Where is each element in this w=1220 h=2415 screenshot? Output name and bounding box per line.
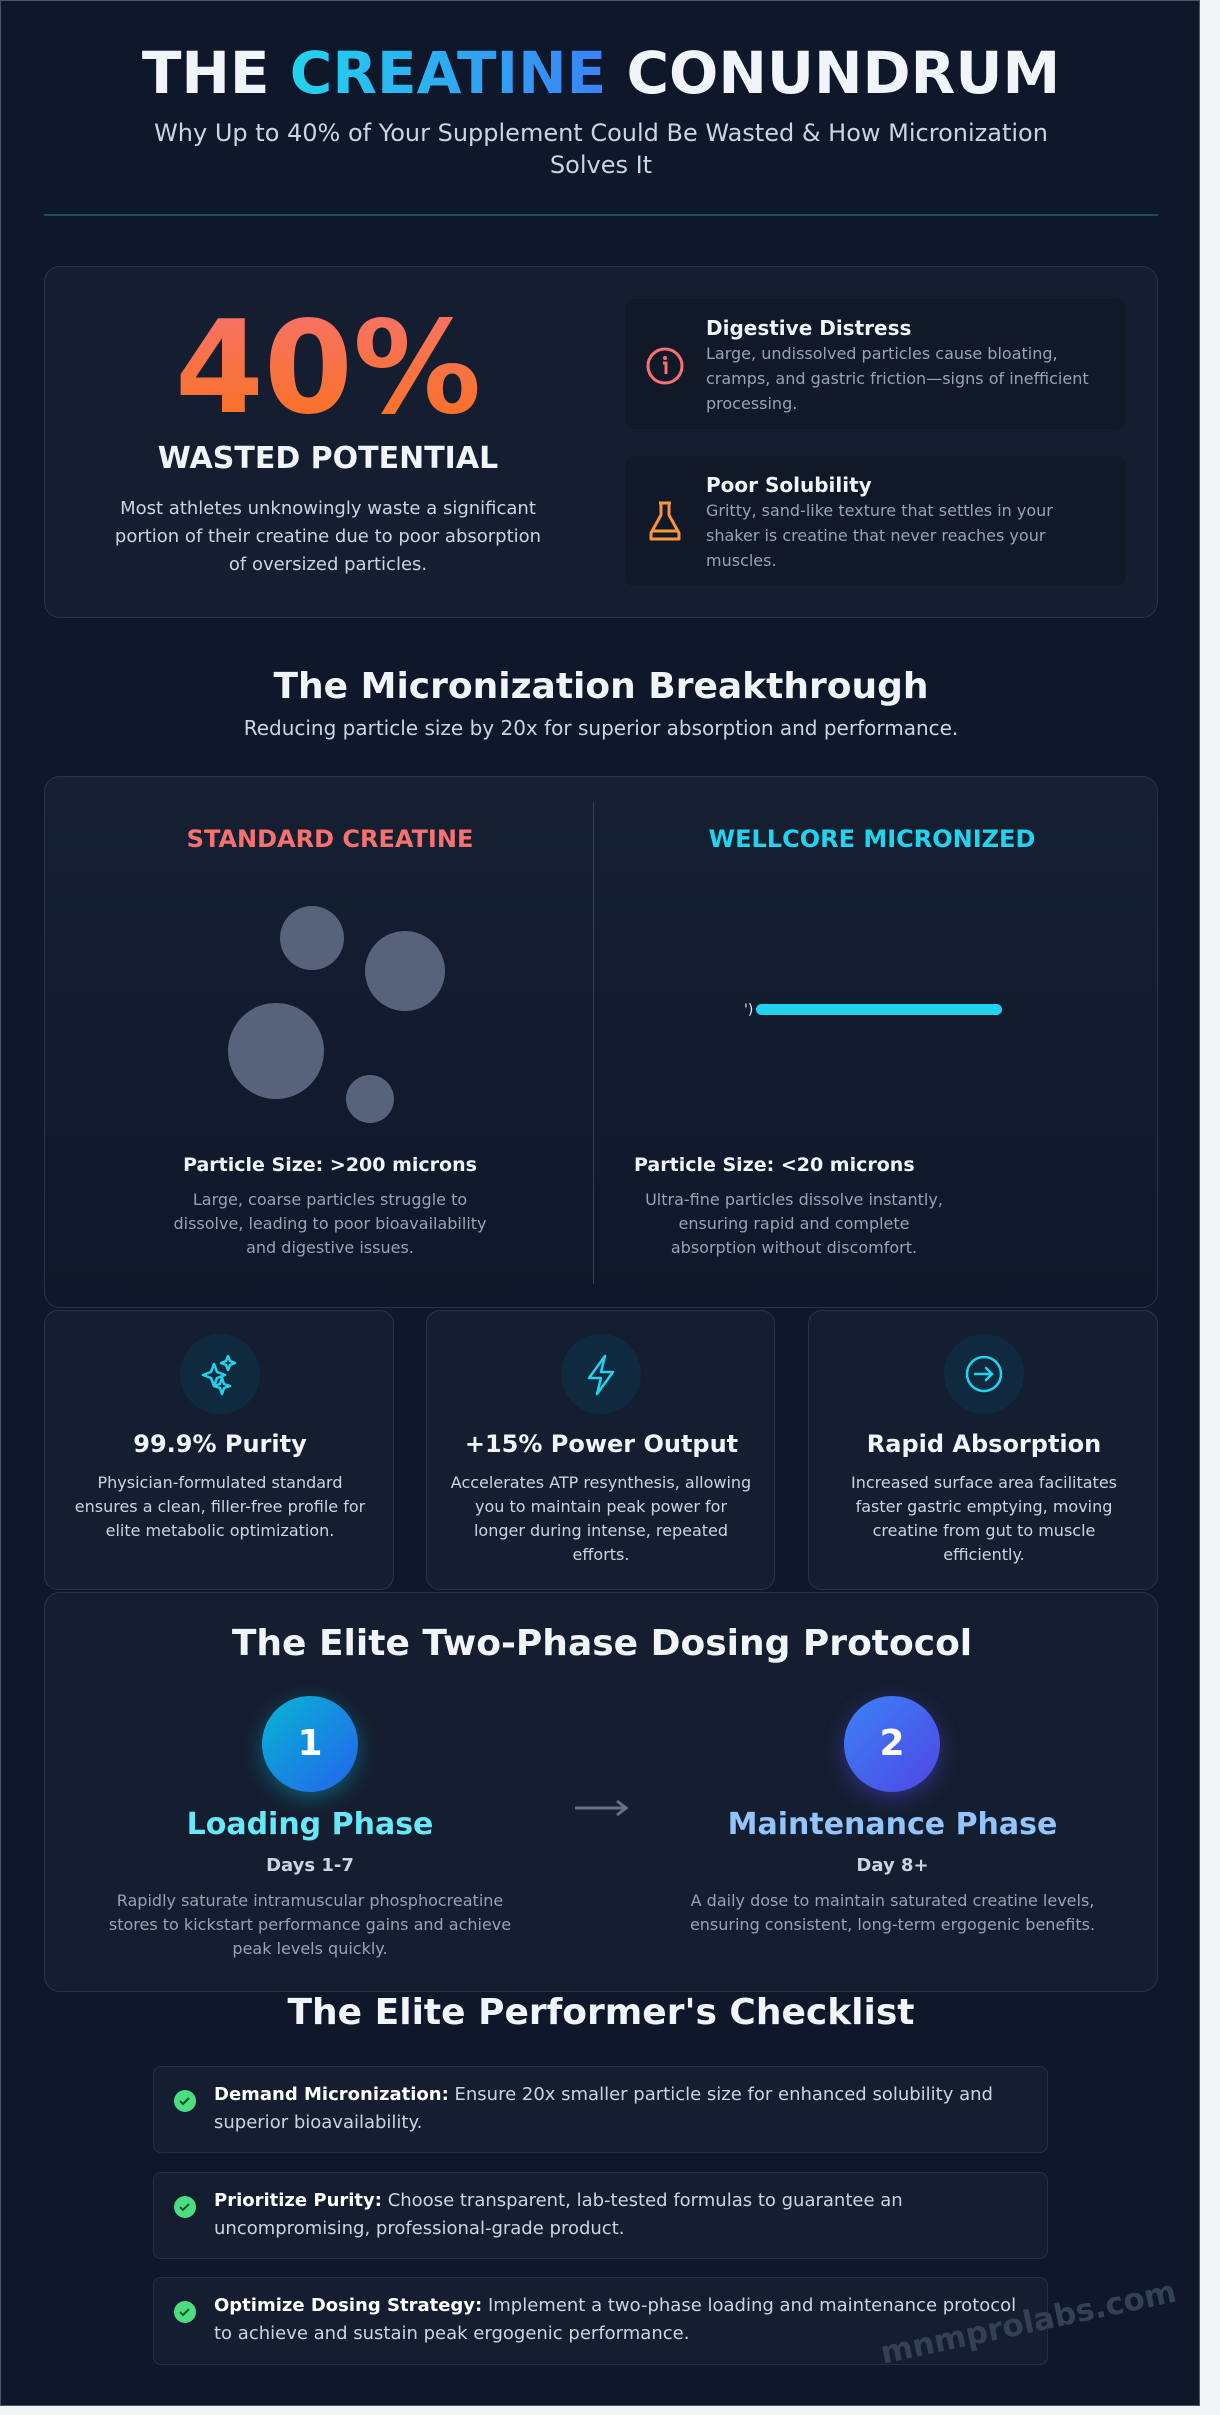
card: digestive distress [626, 299, 1125, 429]
title: Rapid Absorption [867, 1430, 1101, 1458]
icon: check [174, 2090, 196, 2112]
stat: 40% [105, 291, 551, 447]
label: Particle Size: <20 microns [634, 1154, 915, 1176]
description: Ultra-fine particles dissolve instantly, ensuring rapid and complete absorption without discomfort. [645, 1190, 943, 1257]
text: Demand Micronization: Ensure 20x smaller particle size for enhanced solubility and superior bioavailability. [214, 2084, 993, 2133]
text: Optimize Dosing Strategy: Implement a two-phase loading and maintenance protocol to achieve and sustain peak ergogenic performance. [214, 2295, 1016, 2344]
badge 2 [844, 1696, 940, 1792]
checklist item 3 [153, 2277, 1048, 2365]
text: Digestive Distress [706, 316, 911, 340]
feature: power output [426, 1310, 775, 1590]
description: Rapidly saturate intramuscular phosphocreatine stores to kickstart performance gains and achieve peak levels quickly. [109, 1891, 511, 1958]
column: standard creatine [173, 825, 486, 1257]
panel: comparison [44, 776, 1158, 1308]
text: Large, undissolved particles cause bloating, cramps, and gastric friction—signs of inefficient processing. [706, 344, 1089, 413]
heading: checklist: The Elite Performer's Checklist [288, 1992, 914, 2033]
days: Days 1-7 [266, 1855, 354, 1876]
graphic: fine particles [744, 1002, 1002, 1018]
phase 1 [109, 1692, 511, 1958]
graphic: large particles [228, 906, 445, 1123]
card: poor solubility [626, 456, 1125, 586]
label: Particle Size: >200 microns [183, 1154, 477, 1176]
badge 1 [262, 1696, 358, 1792]
title: 99.9% Purity [133, 1430, 307, 1458]
arrow [575, 1800, 628, 1816]
description: Most athletes unknowingly waste a significant portion of their creatine due to poor absorption of oversized particles. [115, 498, 541, 575]
description: Increased surface area facilitates faster gastric emptying, moving creatine from gut to muscle efficiently. [851, 1473, 1117, 1564]
title: +15% Power Output [465, 1430, 738, 1458]
description: Accelerates ATP resynthesis, allowing you to maintain peak power for longer during intense, repeated efforts. [451, 1473, 751, 1564]
days: Day 8+ [856, 1855, 929, 1876]
icon: bolt [561, 1334, 641, 1414]
badge 1: 1 [297, 1723, 323, 1764]
checklist item 2 [153, 2172, 1048, 2259]
icon: flask [650, 502, 680, 540]
icon: arrow circle [944, 1334, 1024, 1414]
checklist item 1 [153, 2066, 1048, 2153]
icon: info [646, 348, 684, 384]
description: Large, coarse particles struggle to dissolve, leading to poor bioavailability and digestive issues. [173, 1190, 486, 1257]
description: Physician-formulated standard ensures a clean, filler-free profile for elite metabolic optimization. [75, 1473, 365, 1540]
description: A daily dose to maintain saturated creatine levels, ensuring consistent, long-term ergogenic benefits. [690, 1891, 1095, 1934]
heading: STANDARD CREATINE [187, 825, 473, 853]
heading: micronization breakthrough: The Micronization Breakthrough [274, 666, 928, 707]
text: Poor Solubility [706, 473, 872, 497]
watermark: mnmprolabs.com [877, 2274, 1180, 2372]
icon: check [174, 2301, 196, 2323]
phase 2 [690, 1691, 1095, 1934]
badge 2: 2 [879, 1723, 905, 1764]
title: THE CREATINE CONUNDRUM [142, 39, 1060, 107]
heading: WELLCORE MICRONIZED [709, 825, 1035, 853]
text: Prioritize Purity: Choose transparent, lab-tested formulas to guarantee an uncompromising, professional-grade product. [214, 2190, 903, 2239]
subtitle: Why Up to 40% of Your Supplement Could Be Wasted & How Micronization Solves It [154, 119, 1048, 179]
title: Maintenance Phase [728, 1807, 1057, 1842]
title: Loading Phase [187, 1807, 433, 1842]
text: Gritty, sand-like texture that settles in your shaker is creatine that never reaches your muscles. [706, 501, 1053, 570]
column: micronized [634, 825, 1035, 1257]
graphic: fine particles: ') [744, 1002, 753, 1018]
heading: The Elite Two-Phase Dosing Protocol [232, 1623, 972, 1664]
panel: wasted potential [44, 266, 1158, 618]
subheading: Reducing particle size by 20x for superior absorption and performance. [244, 716, 958, 740]
heading: wasted potential: WASTED POTENTIAL [158, 441, 498, 476]
feature: rapid absorption [808, 1310, 1158, 1590]
stat: 40%: 40% [175, 294, 481, 443]
icon: check [174, 2196, 196, 2218]
feature: purity [44, 1310, 394, 1590]
icon: sparkles [180, 1334, 260, 1414]
panel: dosing protocol [44, 1592, 1158, 1992]
